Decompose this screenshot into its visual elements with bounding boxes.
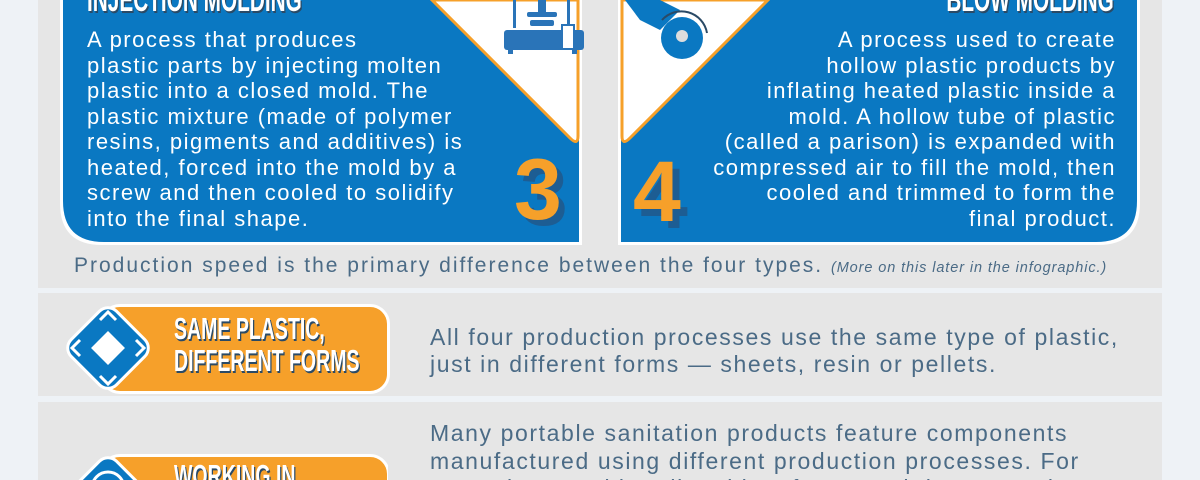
panels svg: 4: [633, 144, 681, 240]
text: same plastic: All four production processes use the same type of plastic,: [430, 324, 1119, 350]
text: injection: heated, forced into the mold by a: [87, 154, 457, 180]
text: blow: A process used to create: [838, 27, 1116, 52]
orange label: [100, 304, 390, 394]
text: working: manufactured using different production processes. For: [430, 448, 1080, 474]
icon: blow machine: [625, 0, 707, 59]
icon: gear diamond: [79, 456, 138, 480]
text: blow: inflating heated plastic inside a: [767, 78, 1116, 103]
gray row 3: [38, 402, 1162, 480]
number 4: 4: [640, 151, 688, 247]
icon: diamond arrows: [66, 306, 150, 390]
text: blow: mold. A hollow tube of plastic: [788, 104, 1116, 128]
text: same plastic: just in different forms — sheets, resin or pellets.: [430, 351, 997, 377]
panel 3: [60, 0, 582, 245]
text: working: Many portable sanitation products feature components: [430, 420, 1068, 446]
text: blow: compressed air to fill the mold, then: [713, 154, 1116, 180]
panel 4: [618, 0, 1140, 245]
text: injection: screw and then cooled to solidify: [87, 180, 454, 205]
text: blow: cooled and trimmed to form the: [767, 180, 1116, 205]
text: same plastic: [429, 324, 1119, 377]
text: injection: into the final shape.: [87, 206, 309, 230]
note: production speed: Production speed is the primary difference between the four types. (More on this later in the infographic.): [74, 254, 1107, 277]
text: injection: plastic parts by injecting molten: [87, 52, 442, 78]
text: injection: plastic into a closed mold. The: [87, 78, 429, 103]
panels svg: 3: [514, 142, 562, 238]
text: injection: [87, 27, 463, 230]
text: working: [430, 420, 1080, 480]
text: injection: plastic mixture (made of polymer: [87, 104, 453, 128]
text: blow: hollow plastic products by: [826, 52, 1116, 78]
badge: same plastic: SAME PLASTIC,: [174, 311, 325, 346]
gray backdrop top: [38, 0, 1162, 288]
text: injection: resins, pigments and additives) is: [87, 129, 463, 154]
badge: same plastic: DIFFERENT FORMS: [174, 343, 360, 378]
number 3: 3: [520, 148, 568, 244]
icon: injection machine: [504, 0, 584, 54]
panels svg: [60, 0, 1140, 247]
text: blow: final product.: [969, 206, 1116, 230]
text: blow: [713, 27, 1116, 230]
text: blow: (called a parison) is expanded with: [725, 129, 1116, 154]
badge: same plastic: [66, 304, 390, 394]
gray row 2: [38, 293, 1162, 396]
text: injection: A process that produces: [87, 27, 358, 52]
badge: working in: [79, 454, 388, 480]
